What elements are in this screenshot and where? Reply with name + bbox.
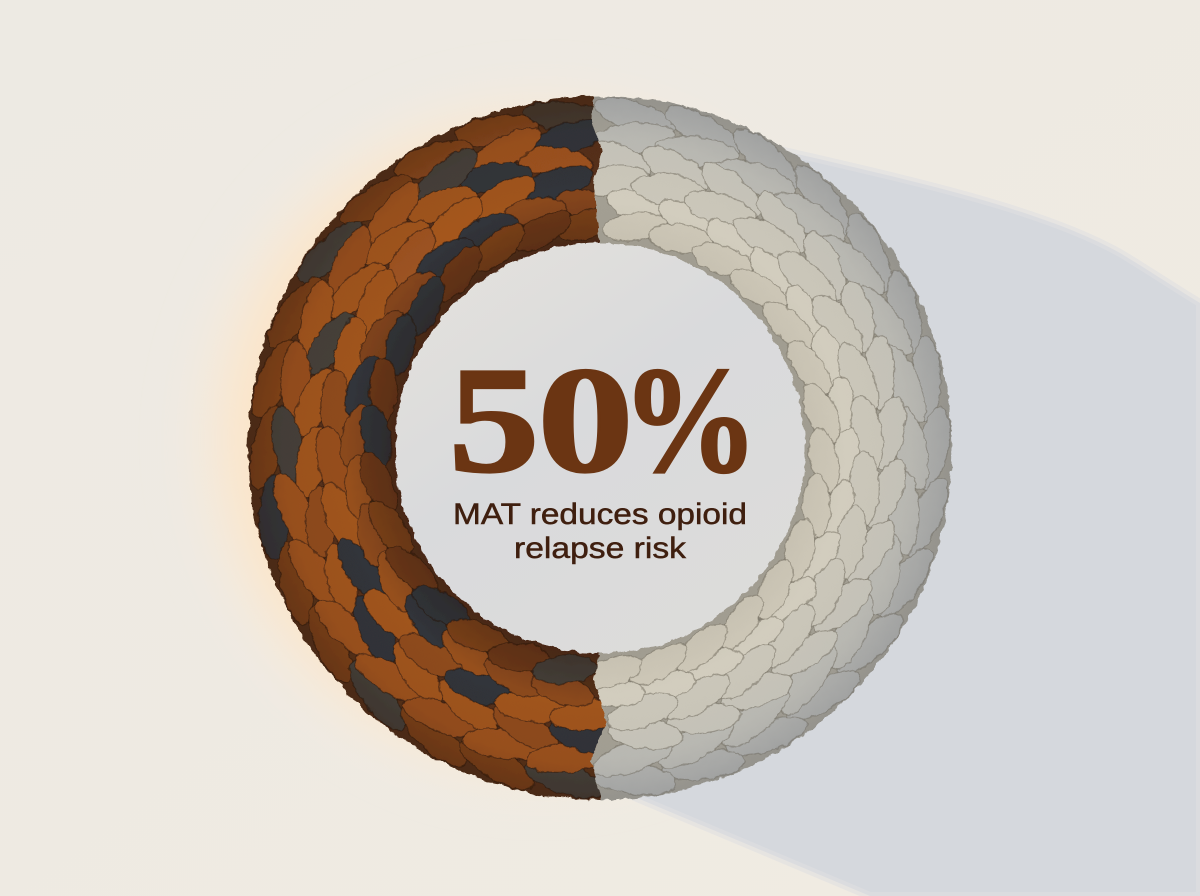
caption line 2: relapse risk: [514, 532, 687, 565]
cast shadow: [630, 150, 1200, 896]
caption: [453, 498, 747, 565]
center statistic: 50%: %: [622, 336, 758, 505]
caption line 1: MAT reduces opioid: [453, 498, 747, 531]
ring segment: undyed grey wool, 50 percent: [590, 96, 953, 801]
center statistic: 50%: 0: [537, 335, 634, 504]
donut hole: [385, 233, 815, 663]
ring segment: rust and charcoal wool, 50 percent: [246, 94, 606, 802]
center statistic: 50%: [448, 335, 758, 505]
center statistic: 50%: 5: [448, 336, 540, 504]
knitted donut chart scene: [206, 94, 1200, 896]
warm glow around the ring: [165, 65, 915, 815]
knitted ring: [240, 88, 960, 808]
infographic frame: [206, 94, 1200, 896]
